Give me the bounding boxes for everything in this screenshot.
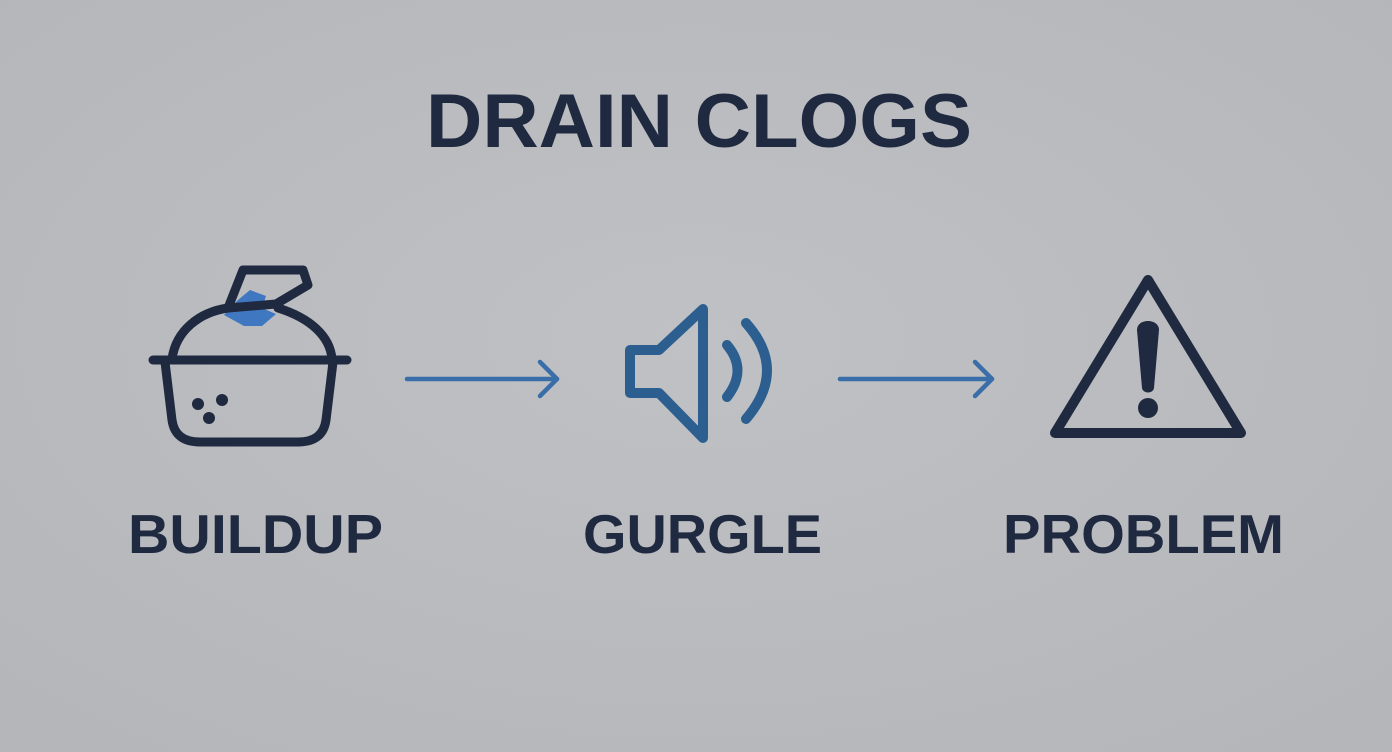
label: buildup: BUILDUP [128, 503, 383, 565]
dots [192, 394, 228, 424]
label: problem: PROBLEM [1003, 503, 1284, 565]
arrow 1 [407, 362, 557, 396]
icon: speaker [630, 309, 767, 438]
arrow 2 [840, 362, 992, 396]
label: gurgle: GURGLE [583, 503, 822, 565]
icon: warning [1055, 280, 1241, 433]
title: DRAIN CLOGS [426, 79, 972, 164]
icon: buildup pot [153, 270, 347, 442]
